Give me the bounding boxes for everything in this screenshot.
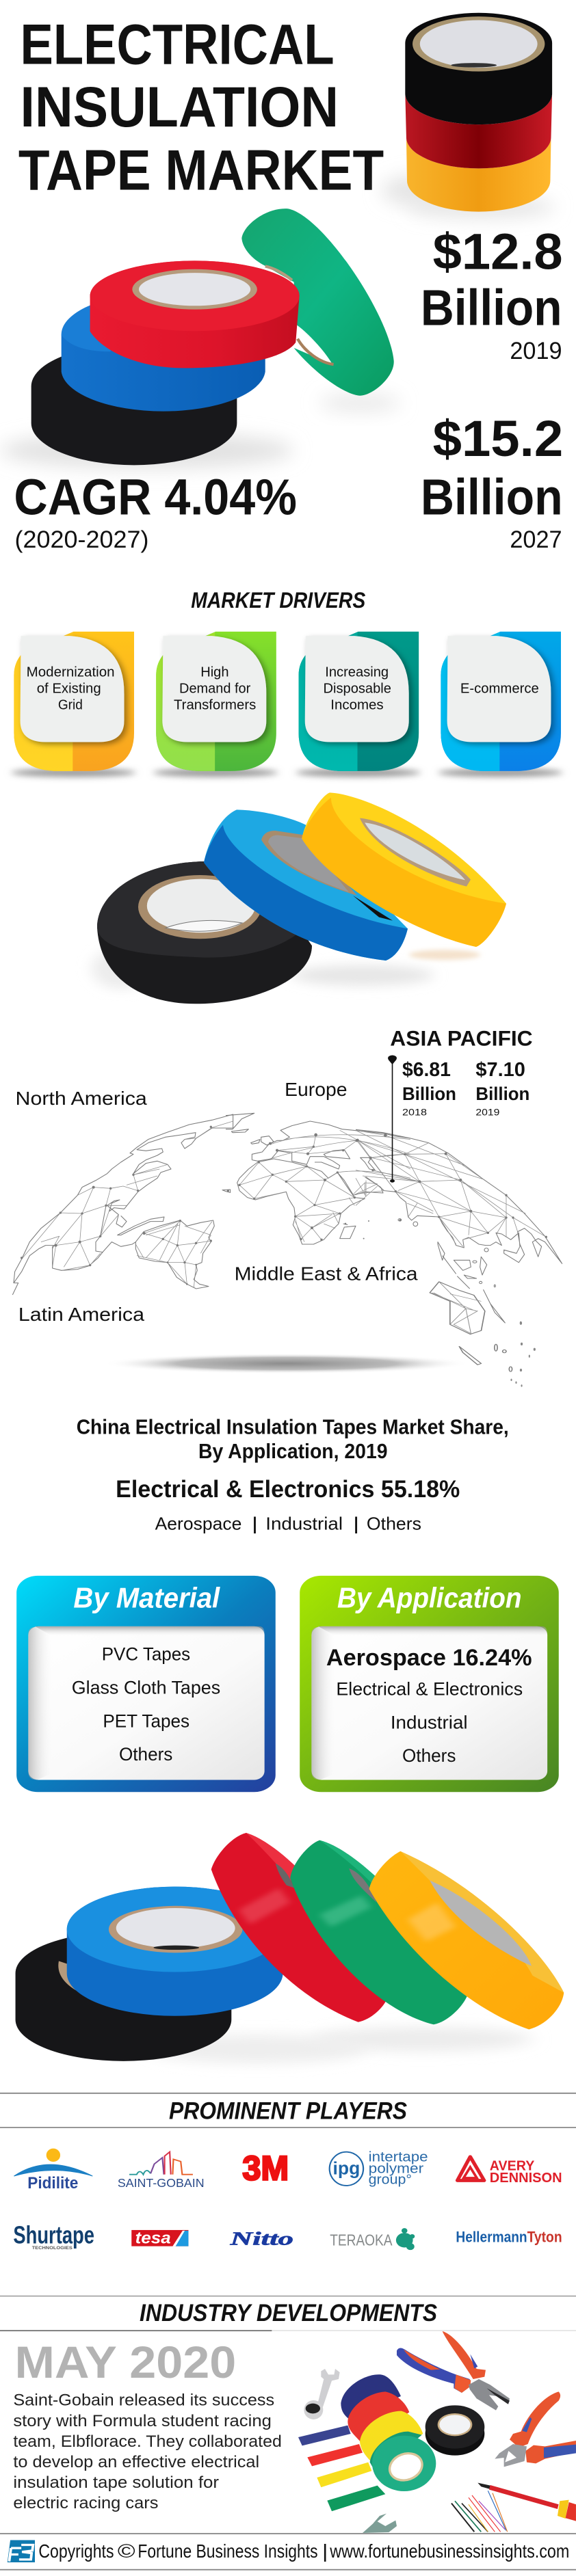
world map: asia — [356, 1129, 562, 1324]
heading: market drivers: MARKET DRIVERS — [191, 588, 366, 613]
stat: 2019 market size: 2019 — [510, 338, 562, 364]
stat: 2027 market size — [421, 410, 563, 553]
stat: CAGR: CAGR 4.04% — [14, 469, 297, 526]
card: increasing disposable incomes: Increasing — [325, 664, 389, 680]
panel: by material — [16, 1576, 276, 1792]
image: five tape rolls — [16, 1833, 564, 2063]
date: may 2020: MAY 2020 — [14, 2337, 236, 2388]
tool: top wrench — [304, 2369, 340, 2419]
card: increasing disposable incomes — [296, 632, 421, 777]
card: increasing disposable incomes: Disposable — [324, 680, 391, 696]
logo: avery dennison: DENNISON — [490, 2169, 562, 2185]
map floor shadow — [103, 1353, 470, 1373]
stat: asia pacific 2019: 2019 — [475, 1106, 499, 1118]
text: development description: insulation tape solution for — [13, 2473, 219, 2491]
stat: asia pacific 2018 — [402, 1058, 456, 1118]
title: ELECTRICAL — [21, 13, 335, 77]
stat: asia pacific 2019: Billion — [475, 1084, 529, 1104]
card: high demand for transformers: Transformers — [174, 697, 256, 712]
stat: asia pacific 2018: Billion — [402, 1084, 456, 1104]
stat: asia pacific 2018: 2018 — [402, 1106, 427, 1118]
panel: by application: Industrial — [391, 1712, 468, 1733]
logo: avery dennison: AVERY — [490, 2158, 535, 2173]
logo: intertape polymer group — [330, 2149, 428, 2187]
logo: intertape polymer group: ipg — [333, 2159, 360, 2178]
card: modernization of existing grid: Modernization — [27, 664, 115, 680]
stat: asia pacific 2019: $7.10 — [475, 1058, 525, 1080]
section: china share and segmentation — [16, 1415, 559, 1792]
image: tapes and tools — [298, 2331, 576, 2533]
logo: teraoka: TERAOKA — [330, 2231, 393, 2249]
card: modernization of existing grid: Grid — [58, 697, 83, 712]
heading: china market share: By Application, 2019 — [198, 1439, 388, 1463]
map pin — [388, 1056, 397, 1183]
world map: americas — [12, 1114, 233, 1295]
footer: © — [118, 2541, 135, 2562]
footer — [8, 2540, 569, 2562]
tool: top pliers — [397, 2331, 510, 2411]
tool: right pliers — [495, 2391, 576, 2467]
footer: | — [322, 2541, 328, 2562]
image: four coloured tape rolls — [0, 209, 400, 469]
logo: nitto: Nitto — [229, 2227, 293, 2249]
panel: by material: PVC Tapes — [102, 1643, 190, 1664]
stat: 2027 market size: $15.2 — [433, 410, 563, 467]
logo: saint-gobain: SAINT-GOBAIN — [118, 2177, 205, 2190]
logo: pidilite: Pidilite — [27, 2173, 78, 2192]
section: regional map labels and lower islands — [16, 1027, 536, 1387]
logo: saint-gobain — [118, 2152, 205, 2190]
map: australia and south pacific islands — [430, 1282, 512, 1371]
title — [18, 13, 384, 202]
text: other applications: | — [252, 1514, 258, 1534]
black tape roll — [426, 2405, 484, 2456]
panel: by material: Others — [119, 1744, 172, 1765]
tool: wires — [451, 2491, 508, 2532]
card: e-commerce: E-commerce — [460, 680, 539, 696]
logo: shurtape — [13, 2222, 94, 2251]
card: modernization of existing grid: of Existing — [37, 680, 101, 696]
stat: 2027 market size: Billion — [421, 469, 563, 526]
title: TAPE MARKET — [18, 139, 384, 202]
logo: tesa: tesa — [135, 2228, 171, 2247]
logo: hellermanntyton: Hellermann — [456, 2229, 527, 2245]
image: black blue and yellow tape rolls — [92, 792, 506, 1004]
divider rules — [0, 2093, 576, 2571]
tool: bottom wrench — [363, 2514, 397, 2533]
text: development description: story with Formula student racing — [13, 2411, 272, 2430]
footer: Copyrights — [38, 2541, 114, 2562]
stat: 2027 market size: 2027 — [510, 526, 562, 553]
text: other applications — [155, 1514, 421, 1534]
logo: intertape polymer group: intertape — [369, 2149, 428, 2164]
label: latin america: Latin America — [18, 1304, 144, 1325]
panel: by application — [300, 1576, 559, 1792]
logo: shurtape: TECHNOLOGIES — [32, 2246, 73, 2251]
text: other applications: Others — [367, 1514, 421, 1534]
text: development description: to develop an effective electrical — [13, 2452, 259, 2471]
logo: shurtape: Shurtape — [13, 2222, 94, 2249]
card: high demand for transformers: High — [200, 664, 229, 680]
logo: hellermanntyton: Tyton — [527, 2229, 562, 2245]
heading: china market share — [77, 1415, 509, 1463]
logo: fortune business insights — [8, 2540, 35, 2562]
label: middle east and africa: Middle East & Africa — [235, 1263, 418, 1285]
text: development description: team, Elbflorace. They collaborated — [13, 2432, 282, 2451]
tape stack — [341, 2374, 436, 2491]
map: small islands — [510, 1321, 536, 1387]
stat: asia pacific 2019 — [475, 1058, 529, 1118]
world map: europe and africa — [226, 1113, 410, 1244]
heading: prominent players: PROMINENT PLAYERS — [169, 2097, 407, 2125]
card: e-commerce — [438, 632, 563, 777]
label: north america: North America — [16, 1088, 147, 1109]
section: market drivers — [11, 588, 563, 777]
stat: 2019 market size: $12.8 — [433, 224, 563, 280]
text: other applications: Aerospace — [155, 1514, 241, 1534]
text: other applications: | — [353, 1514, 359, 1534]
tape strips — [298, 2426, 385, 2511]
logo: intertape polymer group: polymer — [369, 2160, 423, 2176]
text: development description — [13, 2390, 282, 2512]
title: INSULATION — [21, 75, 339, 139]
section: tape rolls image — [16, 1833, 564, 2063]
logo: 3M: 3M — [242, 2149, 289, 2188]
panel: by material: Glass Cloth Tapes — [72, 1677, 220, 1698]
card: modernization of existing grid — [11, 632, 136, 777]
text: development description: electric racing cars — [13, 2493, 158, 2512]
logo: tesa — [131, 2228, 188, 2247]
panel: by material: PET Tapes — [103, 1710, 189, 1731]
footer: Fortune Business Insights — [138, 2541, 318, 2562]
stat: 2019 market size — [421, 224, 563, 364]
stat: CAGR: (2020-2027) — [14, 526, 148, 553]
card: high demand for transformers: Demand for — [179, 680, 251, 696]
tool: screwdriver — [477, 2483, 576, 2521]
text: development description: Saint-Gobain released its success — [13, 2390, 274, 2409]
text: other applications: Industrial — [265, 1514, 343, 1534]
panel: by application: Others — [402, 1745, 456, 1766]
stat: asia pacific 2018: $6.81 — [402, 1058, 451, 1080]
card: high demand for transformers — [153, 632, 278, 777]
stat: 2019 market size: Billion — [421, 280, 562, 336]
logo: intertape polymer group: group° — [369, 2171, 412, 2187]
section: players and developments — [0, 2093, 576, 2571]
section: headline and market size — [0, 13, 563, 553]
panel: by material: By Material — [73, 1583, 220, 1614]
heading: industry developments: INDUSTRY DEVELOPMENTS — [140, 2300, 438, 2327]
label: europe: Europe — [285, 1079, 347, 1100]
stat: CAGR — [14, 469, 297, 553]
card: increasing disposable incomes: Incomes — [330, 697, 384, 712]
logo: pidilite — [14, 2149, 92, 2192]
logo: avery dennison — [458, 2157, 562, 2185]
image: stacked black red and yellow tapes — [382, 13, 555, 218]
